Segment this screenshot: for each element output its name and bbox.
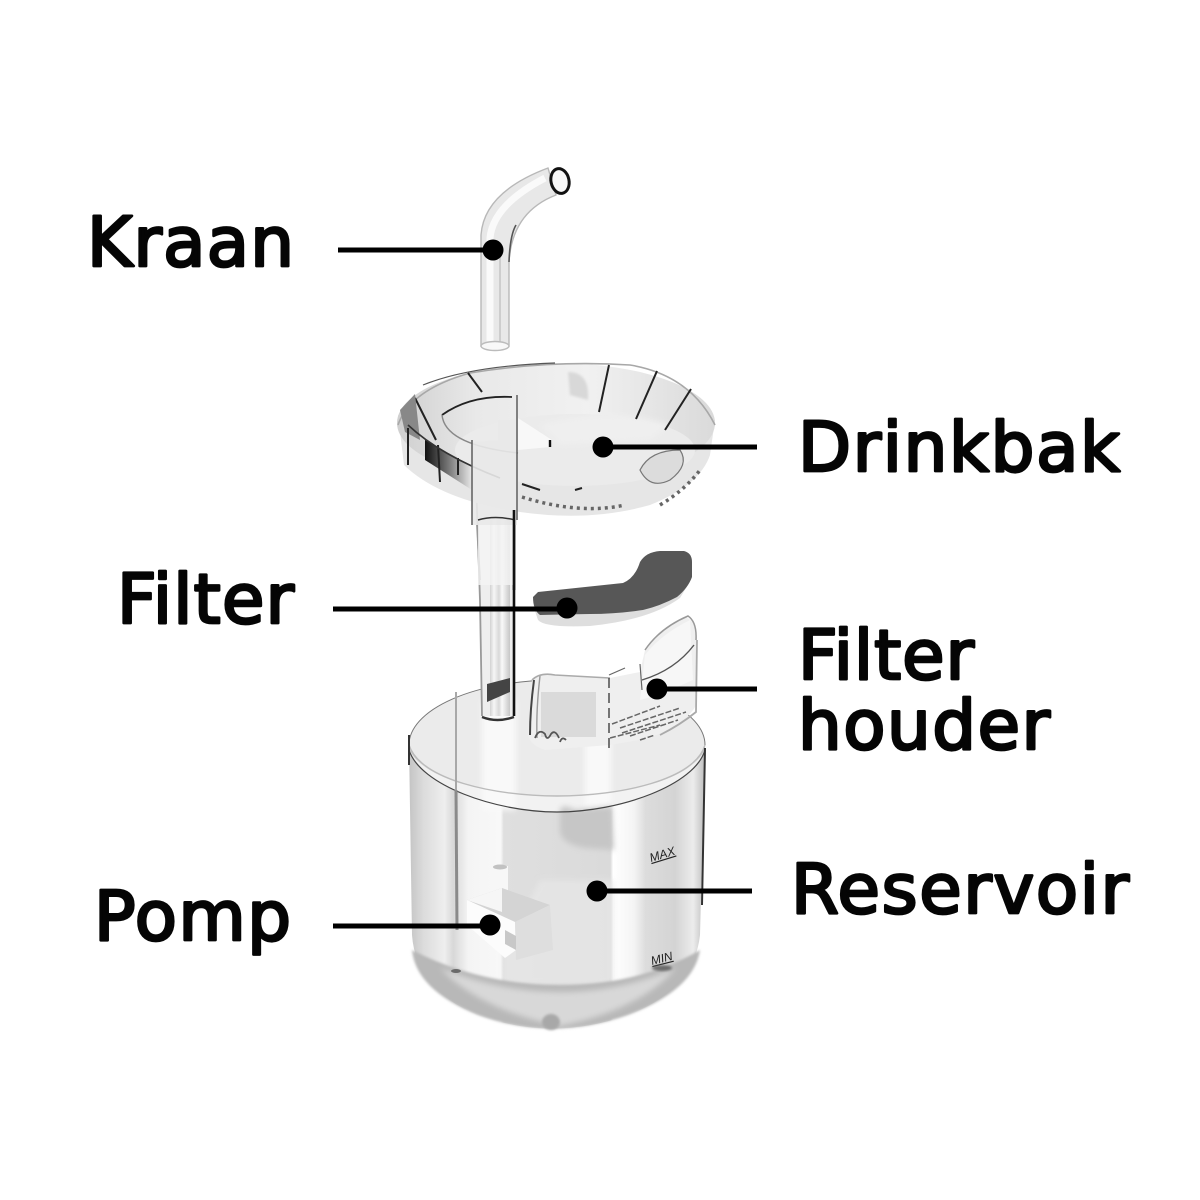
bowl outer wall [398, 415, 715, 516]
holder back wall [528, 617, 697, 750]
bowl drain [640, 450, 683, 483]
divider wall [455, 692, 457, 790]
holder ribs [610, 706, 686, 740]
tube shaft [476, 490, 516, 716]
illustration: filter pad [533, 551, 692, 626]
label: Pomp [94, 877, 291, 957]
label: Drinkbak [798, 408, 1120, 488]
label: Filter [798, 616, 975, 696]
spout body [481, 168, 556, 346]
leader line [657, 686, 757, 692]
illustration: drinking bowl [397, 363, 715, 590]
illustration: water tube [476, 480, 516, 720]
label: Reservoir [791, 850, 1130, 930]
reservoir body [409, 680, 705, 1028]
MIN label: MIN [649, 949, 674, 968]
MAX label: MAX [648, 844, 678, 865]
illustration: reservoir [409, 680, 705, 1030]
bowl ribs [415, 365, 691, 440]
leader line [597, 888, 752, 894]
label: Filter [117, 560, 295, 640]
leader line [603, 444, 757, 450]
illustration: pump [467, 864, 553, 960]
pump top [467, 888, 550, 922]
soft inner shadow [560, 806, 614, 850]
callout: Filter houder [646, 616, 1051, 766]
callout: Reservoir [586, 850, 1130, 930]
callout: Filter houder: houder [798, 686, 1051, 766]
spout bottom opening [481, 342, 509, 350]
leader line [333, 924, 490, 928]
foot [542, 1014, 560, 1030]
bowl dark left wall [400, 394, 420, 440]
leader line [333, 606, 567, 612]
pump outlet [494, 866, 508, 896]
base shading [412, 950, 700, 1028]
pad [533, 551, 692, 615]
callout: Filter [117, 560, 578, 640]
callout: Kraan [87, 203, 504, 283]
water surface [409, 680, 705, 796]
tube inlet column [472, 420, 517, 525]
spout top opening [549, 167, 571, 195]
pump front [467, 900, 516, 958]
illustration: filter holder [528, 616, 697, 750]
bowl rim [398, 364, 715, 425]
bowl dish [397, 363, 715, 483]
pad shadow [533, 578, 692, 626]
bowl floor [455, 414, 695, 486]
leader line [338, 248, 493, 252]
rim lines [409, 680, 705, 745]
illustration: spout [481, 167, 571, 350]
bowl front texture [522, 470, 700, 509]
label: Kraan [87, 203, 294, 283]
callout: Pomp [94, 877, 500, 957]
callout: Drinkbak [592, 408, 1120, 488]
